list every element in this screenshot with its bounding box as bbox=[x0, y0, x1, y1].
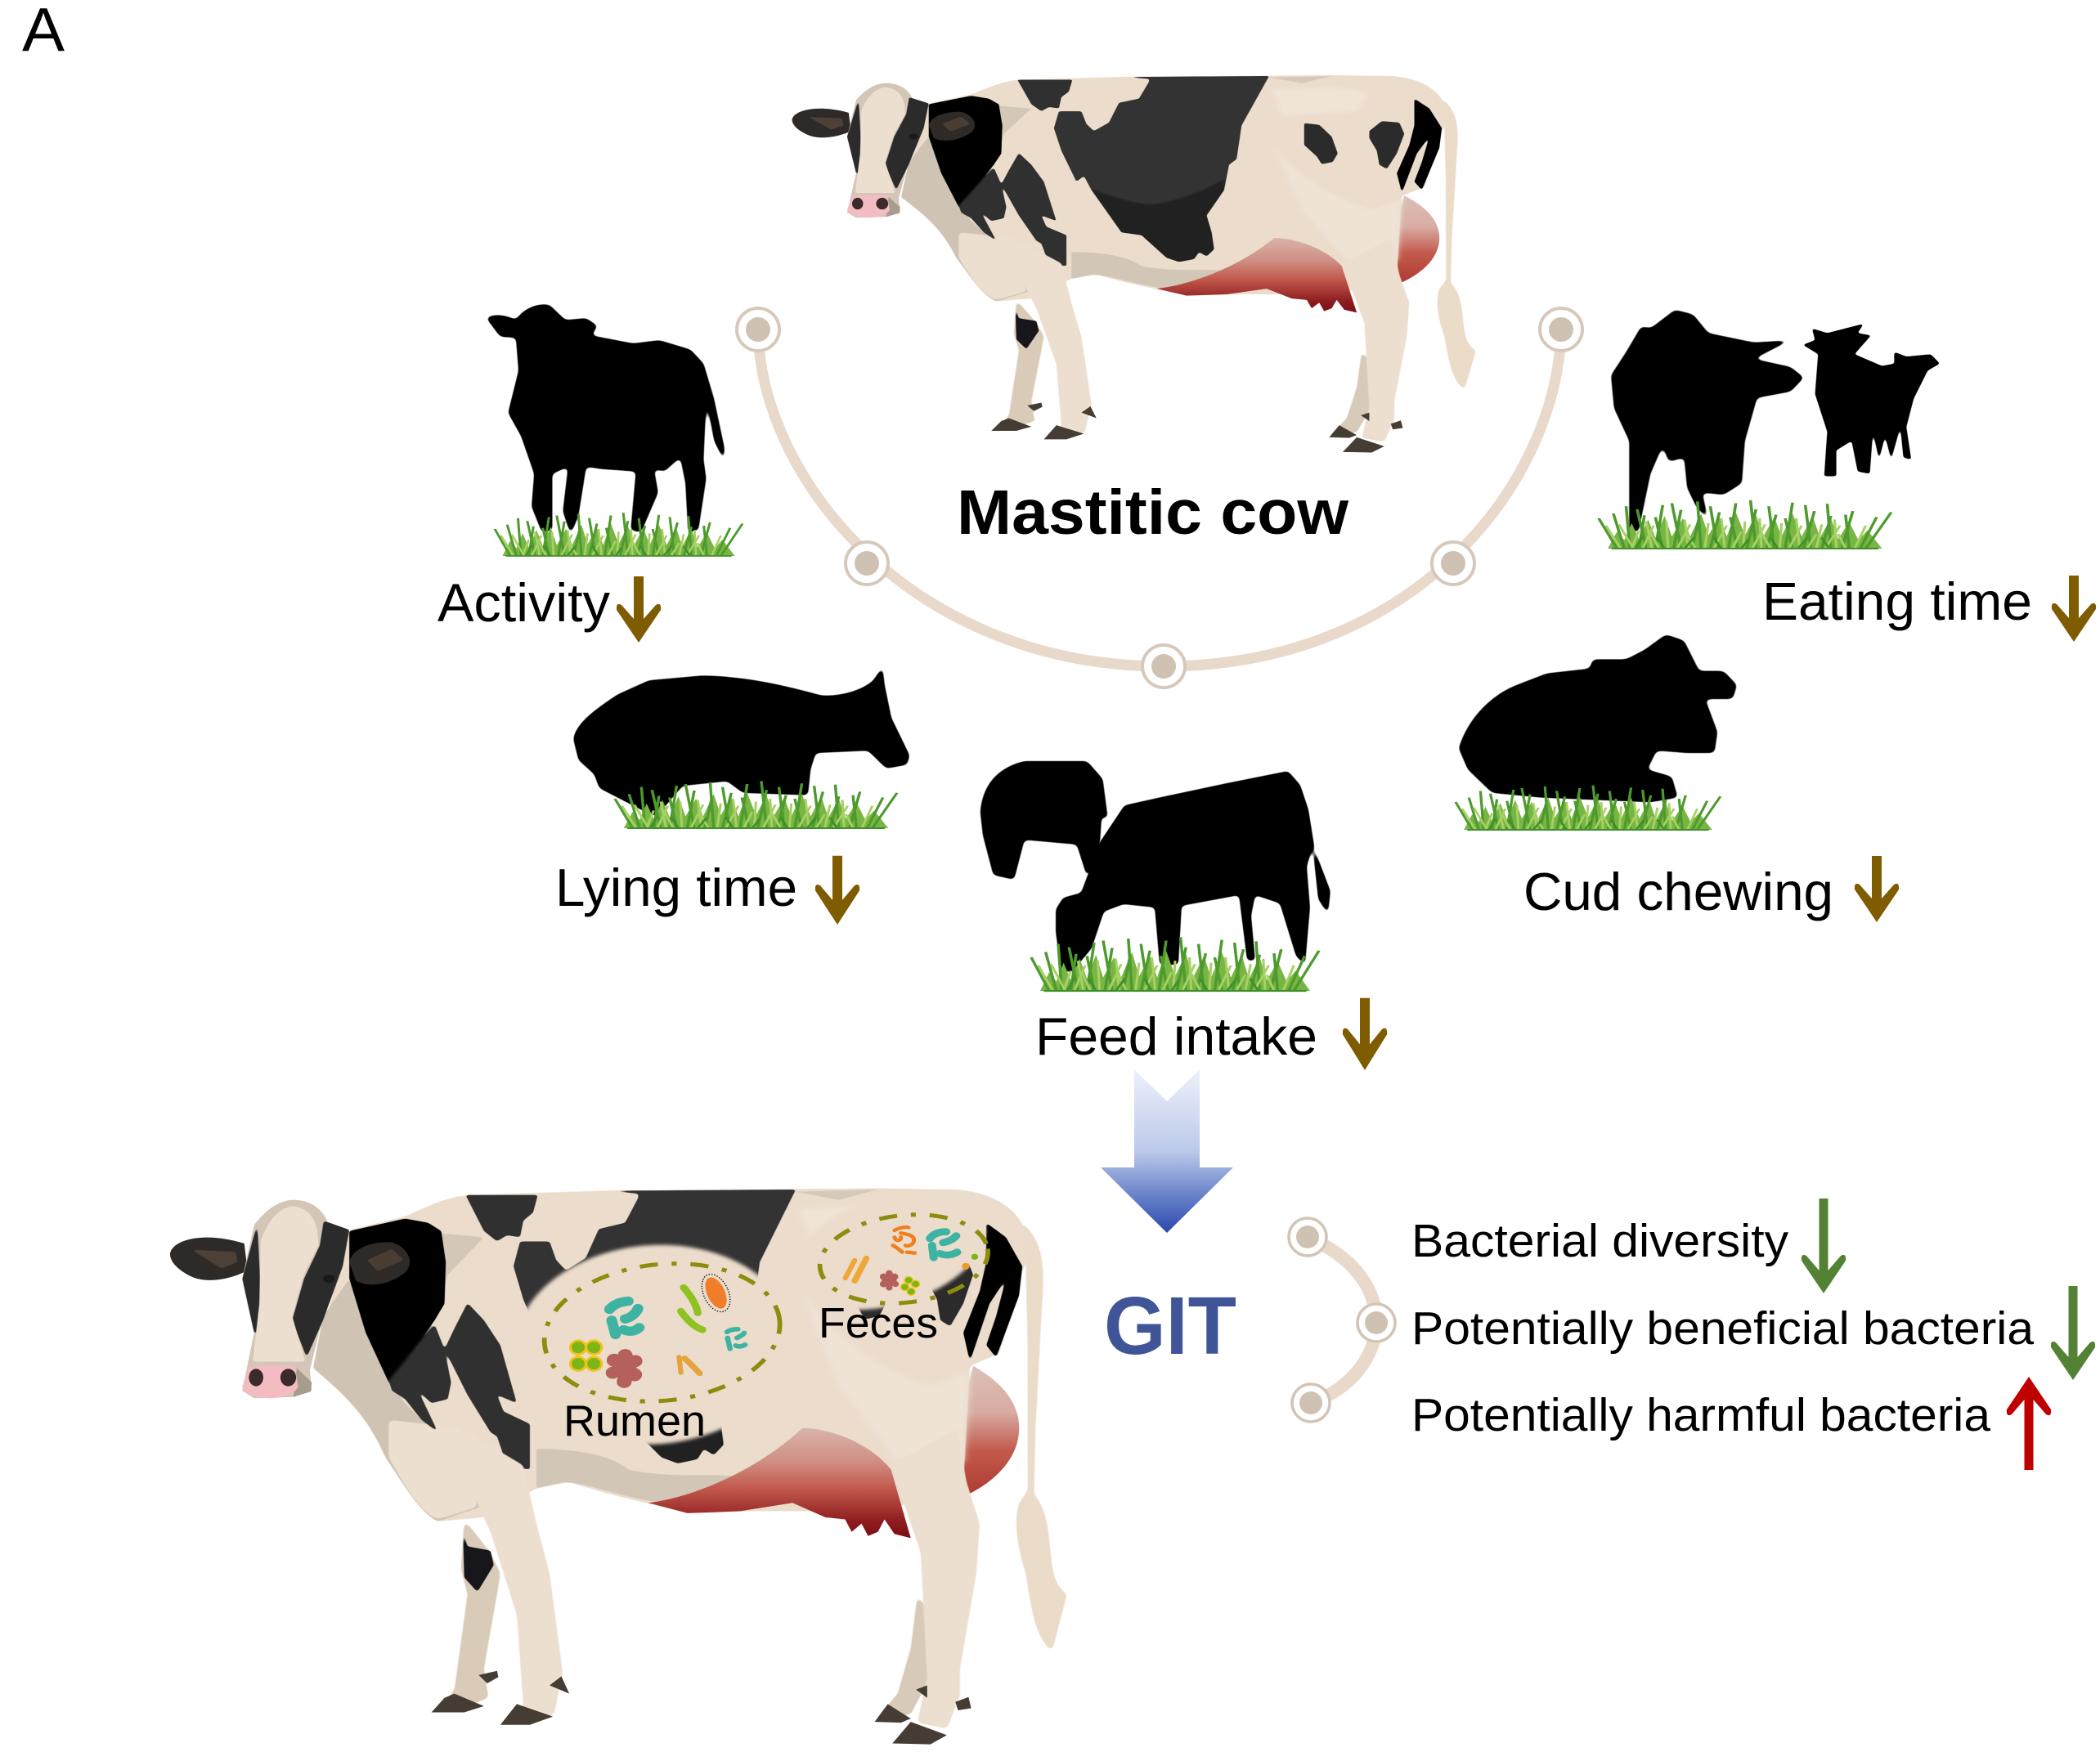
rumen dashed boundary bbox=[534, 1251, 790, 1414]
silhouette: activity cow on grass bbox=[486, 304, 743, 556]
arrow: harmful bacteria up bbox=[2007, 1377, 2051, 1470]
illustration: mastitic cow bbox=[792, 75, 1476, 453]
feces dashed boundary bbox=[813, 1206, 994, 1312]
label: Potentially beneficial bacteria: Potentially beneficial bacteria bbox=[1411, 1302, 2034, 1355]
label: Rumen: Rumen bbox=[563, 1397, 706, 1445]
label: Eating time: Eating time bbox=[1762, 571, 2032, 631]
label: Feed intake: Feed intake bbox=[1035, 1006, 1317, 1066]
label: Potentially harmful bacteria: Potentially harmful bacteria bbox=[1411, 1389, 1990, 1441]
arc connector with nodes bbox=[737, 308, 1582, 688]
label: Feces: Feces bbox=[819, 1300, 938, 1347]
arrow: lying time down bbox=[815, 856, 859, 925]
arrow: beneficial bacteria down bbox=[2051, 1286, 2095, 1380]
arrow: feed intake down bbox=[1343, 998, 1387, 1070]
illustration: cow with rumen and feces microbiota bbox=[170, 1169, 1067, 1745]
arrow: bacterial diversity down bbox=[1802, 1199, 1846, 1293]
label: GIT: GIT bbox=[1104, 1280, 1236, 1372]
feces bacteria bbox=[846, 1227, 957, 1281]
label: Activity: Activity bbox=[438, 572, 610, 633]
arrow: cud chewing down bbox=[1855, 856, 1899, 922]
arrow: eating time down bbox=[2052, 576, 2096, 642]
title: Mastitic cow: Mastitic cow bbox=[957, 477, 1349, 548]
silhouette: two grazing cows on grass bbox=[980, 761, 1330, 991]
bracket connector with nodes bbox=[1289, 1218, 1395, 1422]
silhouette: cud chewing cow on grass bbox=[1456, 634, 1737, 830]
rumen bacteria bbox=[609, 1288, 745, 1373]
arrow: activity down bbox=[617, 576, 661, 643]
rumen and feces lesion cut-outs bbox=[500, 1169, 1006, 1460]
label: Lying time: Lying time bbox=[555, 858, 797, 917]
silhouette: eating cows on grass bbox=[1599, 310, 1940, 549]
label: Bacterial diversity: Bacterial diversity bbox=[1411, 1215, 1789, 1267]
big blue down arrow bbox=[1101, 1069, 1233, 1233]
label: Cud chewing: Cud chewing bbox=[1523, 862, 1833, 921]
silhouette: lying cow on grass bbox=[573, 666, 909, 828]
